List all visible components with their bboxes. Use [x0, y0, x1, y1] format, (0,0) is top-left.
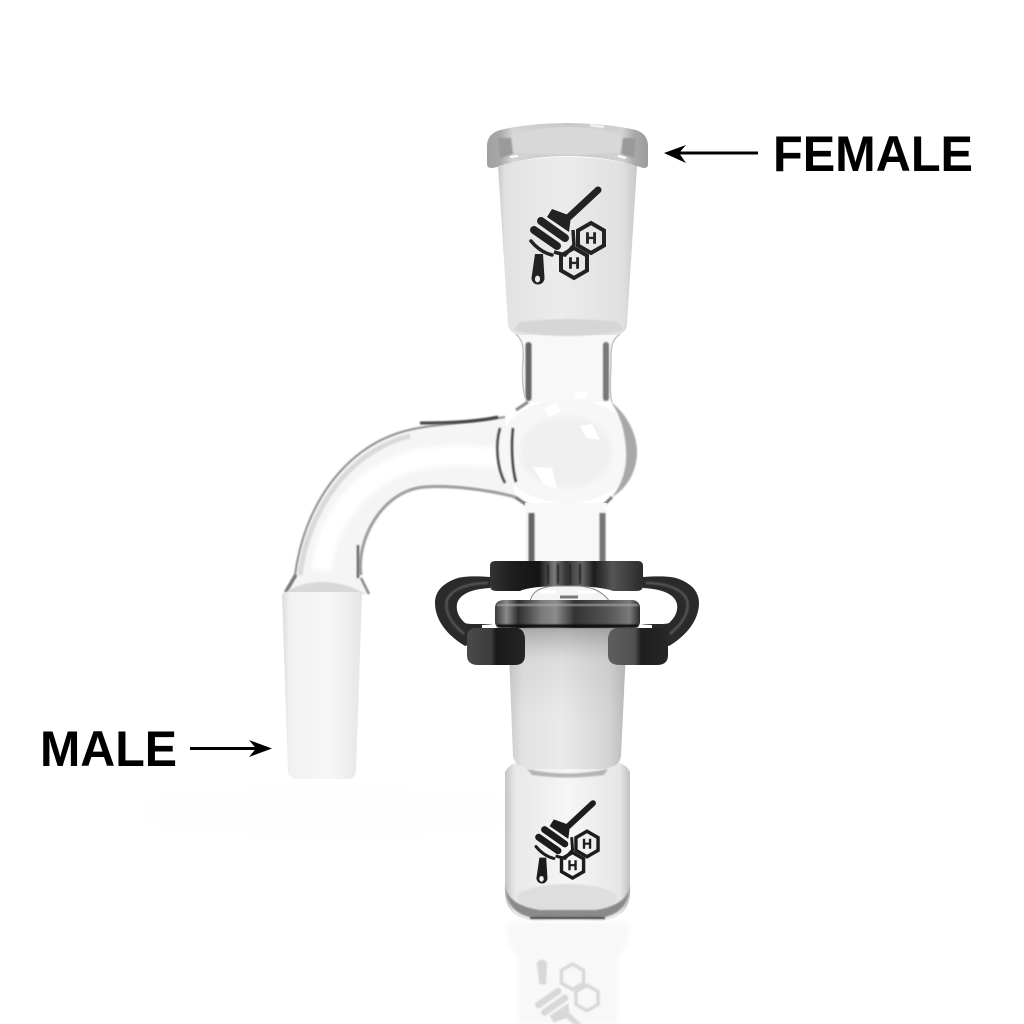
female joint: frosted body: [498, 157, 637, 336]
icon: honey dipper and hexagons logo on jar: H: [568, 858, 577, 873]
glass bulb: [497, 391, 637, 506]
bulb right crescent: [611, 402, 637, 497]
label: FEMALE: FEMALE: [773, 126, 973, 182]
icon: honey dipper and hexagons logo: [531, 190, 604, 285]
clip: lower plate: [495, 600, 640, 628]
icon: honey dipper and hexagons logo: H: [568, 256, 580, 272]
reflection below the jar: [506, 922, 630, 1024]
label: MALE: MALE: [40, 721, 177, 777]
female joint: lip: [487, 123, 648, 168]
icon: honey dipper and hexagons logo on jar: [536, 803, 598, 884]
bottom joint: frosted body: [508, 628, 627, 769]
black keck clip: [435, 561, 699, 665]
upper neck: [513, 333, 622, 410]
arrow: to male joint: [190, 740, 272, 757]
clip: glass between plates: [530, 586, 610, 602]
clip: left handle: [435, 576, 493, 646]
male joint: [282, 582, 365, 779]
clip: right foot: [608, 628, 668, 665]
arrow: to female joint: [664, 145, 758, 163]
label: MALE: [40, 721, 272, 777]
icon: honey dipper and hexagons logo on jar: H: [582, 837, 592, 852]
label: FEMALE: [664, 126, 973, 182]
bottom joint: glass jar: [505, 762, 630, 921]
clip: right handle: [641, 576, 699, 646]
lower neck: [525, 503, 607, 565]
icon: honey dipper and hexagons logo: H: [585, 230, 597, 248]
floor shadow: [130, 796, 530, 828]
clip: upper plate: [490, 561, 643, 591]
bent arm glass tube: [283, 417, 515, 594]
clip: left foot: [467, 628, 525, 665]
